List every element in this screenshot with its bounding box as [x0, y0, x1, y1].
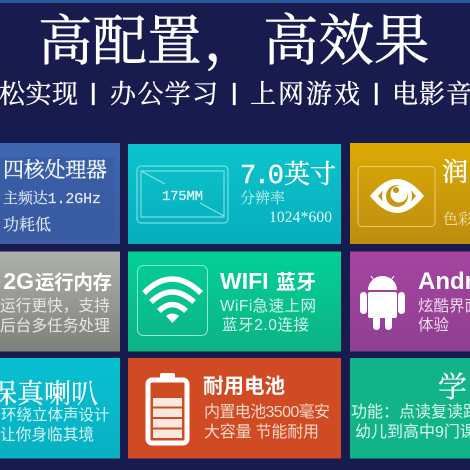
top strip	[0, 0, 470, 3]
icon: android robot	[360, 276, 405, 330]
subtitle: 办公学习	[110, 80, 218, 109]
text: resolution: 1024*600	[269, 209, 332, 226]
heading: wifi bluetooth: 蓝牙	[276, 271, 316, 294]
heading: RAM	[3, 268, 112, 294]
text: capacity: 内置电池3500毫安	[204, 402, 330, 421]
subtitle: 电影音	[392, 80, 470, 109]
text: screen width: 175MM	[162, 189, 203, 205]
subtitle: 松实现	[0, 80, 78, 109]
text: experience: 体验	[418, 316, 450, 334]
heading: screen size: 英寸	[284, 160, 336, 189]
text: runs faster: 运行更快，支持	[0, 297, 110, 315]
panel: Android	[350, 252, 470, 352]
panel: WiFi and Bluetooth	[128, 252, 341, 352]
heading: RAM: 2G	[3, 268, 34, 294]
heading: quad core: 四核处理器	[3, 158, 107, 182]
heading: durable battery: 耐用电池	[203, 375, 285, 398]
subtitle: 上网游戏	[250, 80, 360, 109]
title: 高效果	[263, 12, 430, 73]
text: clock speed: 主频达1.2GHz	[3, 190, 101, 208]
panel: display colour	[350, 143, 470, 244]
panel: 7 inch screen	[128, 144, 341, 244]
text: immersive: 让你身临其境	[0, 425, 94, 444]
text: surround sound: 环绕立体声设计	[1, 406, 110, 424]
panel: battery	[128, 358, 341, 458]
text: multitasking: 后台多任务处理	[0, 317, 110, 335]
text: low power: 功耗低	[3, 216, 51, 234]
heading: screen size: 7.0	[240, 162, 284, 192]
text: fast internet: WiFi急速上网	[220, 297, 316, 315]
text: resolution label: 分辨率	[240, 190, 285, 207]
panel: RAM	[0, 252, 120, 352]
title: ，	[204, 11, 259, 72]
icon: eye	[358, 166, 435, 226]
icon: wifi	[138, 266, 208, 336]
icon: battery	[148, 373, 187, 443]
subtitle	[0, 80, 470, 109]
panel: learning	[350, 358, 470, 458]
heading: display: 润	[442, 158, 468, 187]
title: 高配置	[38, 11, 202, 72]
title	[38, 11, 430, 73]
heading: wifi bluetooth: WIFI	[220, 268, 269, 294]
text: bluetooth version: 蓝牙2.0连接	[222, 316, 309, 334]
text: energy saving: 大容量 节能耐用	[204, 423, 319, 441]
heading: screen size	[240, 160, 336, 192]
panel: hi-fi speaker	[0, 358, 120, 458]
heading: wifi bluetooth	[220, 268, 316, 294]
heading: RAM: 运行内存	[35, 272, 112, 294]
icon: screen outline	[137, 166, 228, 223]
panel: quad core processor	[0, 143, 120, 244]
